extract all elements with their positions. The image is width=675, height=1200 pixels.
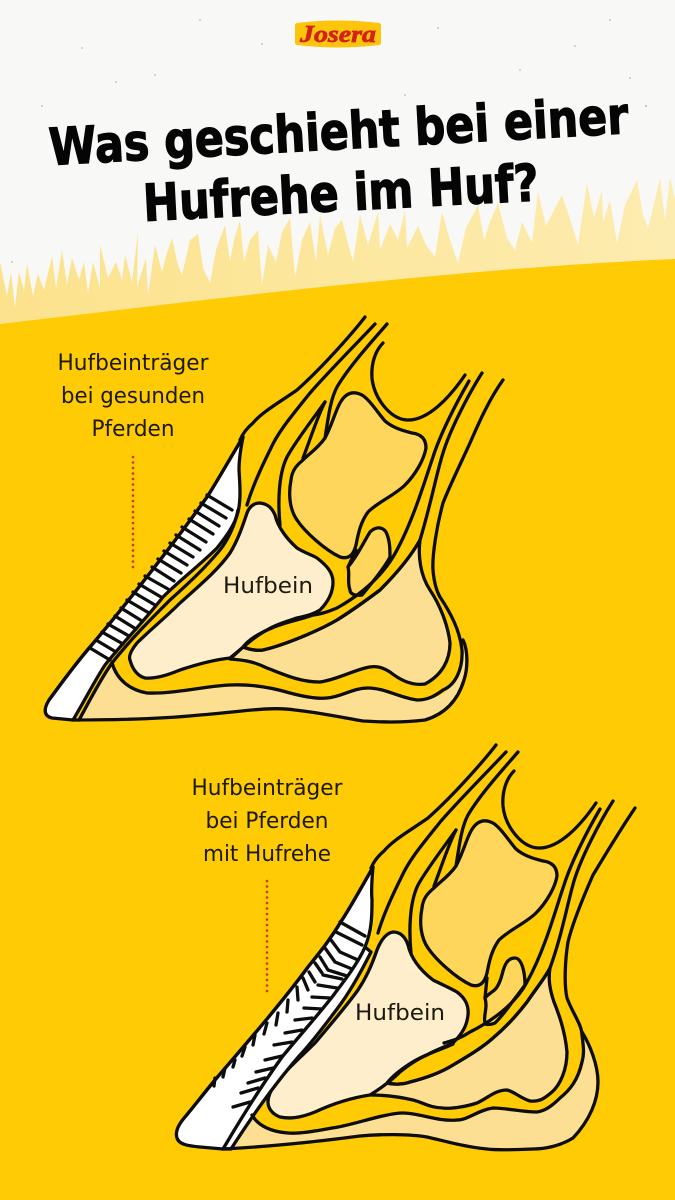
label: laminitis horses: bei Pferden: [206, 809, 328, 834]
paper specks: [11, 19, 647, 263]
digital cushion: [370, 968, 567, 1108]
damaged laminae: [214, 922, 365, 1107]
anatomy outlines: [49, 317, 503, 722]
title: [47, 87, 630, 234]
hoof wall: [176, 867, 373, 1149]
label: healthy horses: Hufbeinträger: [58, 351, 209, 376]
thin white band: [223, 947, 371, 1149]
coffin bone: [130, 503, 333, 678]
short pastern bone: [421, 821, 557, 986]
label: Hufbein: Hufbein: [355, 1001, 445, 1026]
digital cushion: [230, 540, 450, 684]
hoof: healthy: [45, 317, 503, 722]
label: laminitis horses: Hufbeinträger: [192, 776, 343, 801]
sole: [229, 1032, 598, 1150]
navicular bone: [485, 958, 525, 1024]
laminae: [90, 495, 232, 660]
dotted line: laminitis: [266, 881, 268, 993]
label: Hufbein: Hufbein: [223, 574, 313, 599]
label: healthy horses: Pferden: [92, 417, 174, 442]
label: healthy horses: bei gesunden: [61, 384, 205, 409]
sole: [77, 640, 467, 722]
grass: [0, 177, 675, 330]
label: healthy horses: [58, 351, 209, 442]
short pastern bone: [290, 393, 426, 558]
label: laminitis horses: mit Hufrehe: [203, 842, 331, 867]
logo: Josera: [299, 22, 376, 48]
hoof: laminitis: [176, 745, 635, 1150]
label: laminitis horses: [192, 776, 343, 867]
anatomy outlines: [185, 745, 635, 1150]
title: Hufrehe im Huf?: [142, 154, 540, 234]
navicular bone: [348, 528, 390, 595]
hoof wall: [45, 437, 243, 720]
dotted line: healthy: [132, 457, 134, 568]
coffin bone: [268, 932, 468, 1118]
yellow ground: [0, 259, 675, 1200]
